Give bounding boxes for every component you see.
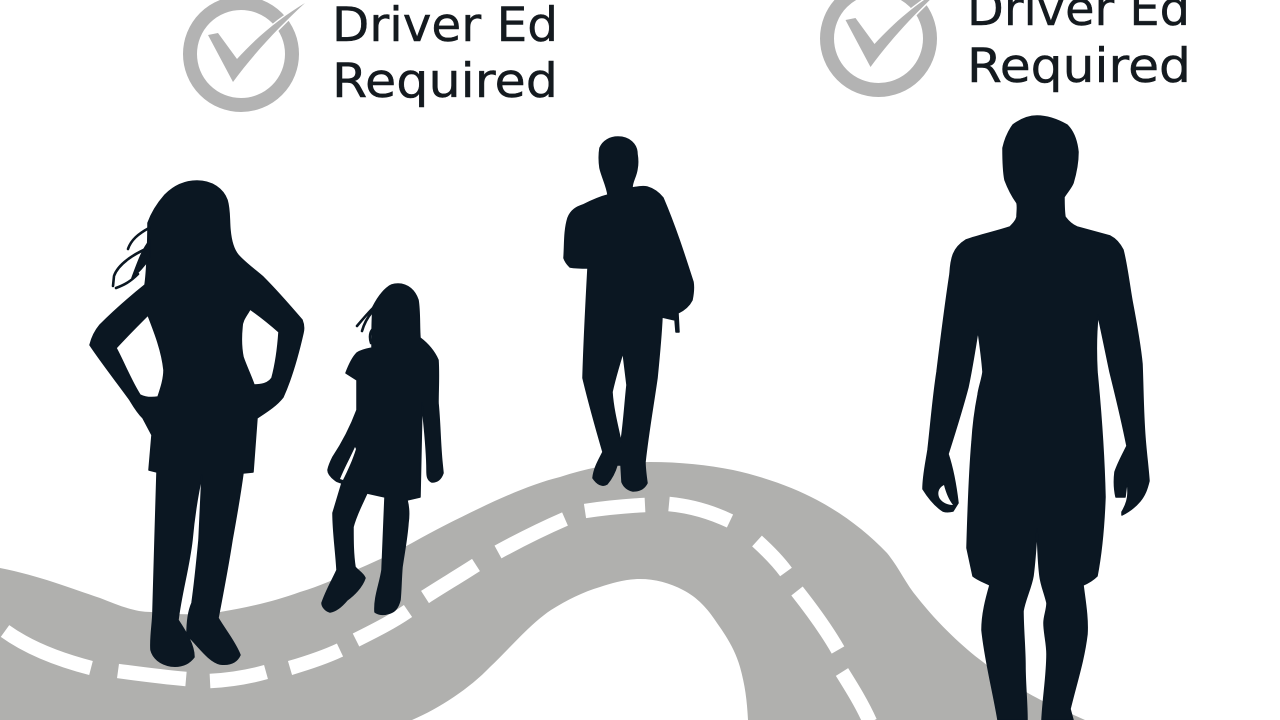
- icon: right check badge: [827, 0, 942, 90]
- icon: left check badge: [190, 3, 305, 105]
- silhouette: teen with backpack: [564, 137, 693, 491]
- label: left Driver Ed Required: [332, 0, 558, 109]
- label: right Driver Ed Required: Required: [967, 39, 1191, 94]
- silhouette: small child walking: [322, 284, 443, 614]
- road centre dashes: [5, 504, 870, 720]
- label: left Driver Ed Required: Required: [332, 54, 558, 109]
- silhouette: tall adult standing: [923, 116, 1149, 720]
- winding grey road: [0, 462, 1085, 720]
- curled left hand gap: [938, 485, 953, 505]
- gap between arm and dress: [340, 447, 356, 480]
- silhouette: girl with hands on hips: [90, 181, 304, 666]
- label: right Driver Ed Required: [967, 0, 1191, 94]
